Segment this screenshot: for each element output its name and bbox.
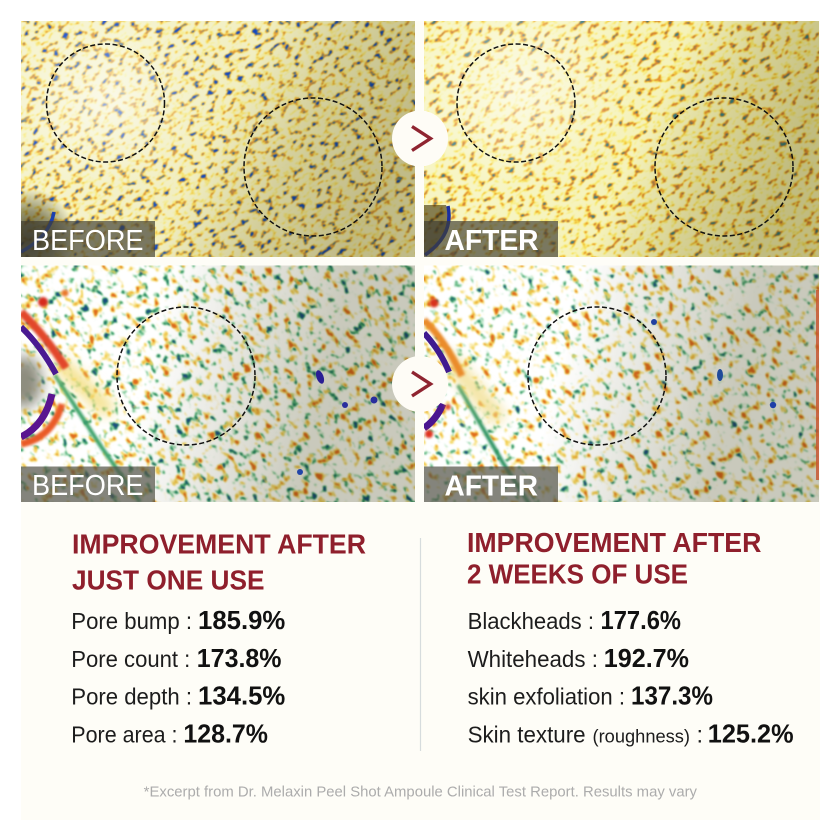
dashed circles: after top [457,44,793,236]
arrow badge: bottom [392,356,448,412]
results list: two weeks: Blackheads : [468,608,594,634]
results list: one use: 173.8% [197,643,282,673]
photo: before, pore map [21,21,415,257]
label: after top [424,221,558,257]
results list: two weeks: Skin texture [468,722,586,748]
photo: after, texture map [424,265,819,505]
label: after bottom [424,466,558,502]
results list: one use: 128.7% [183,718,268,748]
label: after bottom: AFTER [444,470,538,502]
results list: two weeks: 192.7% [604,643,689,673]
results list: two weeks: Whiteheads : [468,646,598,672]
results list: two weeks: skin exfoliation : [468,684,625,710]
dashed circles: before top [46,44,382,236]
footnote: *Excerpt from Dr. Melaxin Peel Shot Ampoule Clinical Test Report. Results may vary [144,784,698,800]
divider [420,538,422,751]
results list: one use: Pore count : [71,646,190,672]
results list: two weeks [468,605,794,748]
dashed circle: before bottom [117,307,255,445]
results list: one use: Pore area : [71,722,178,748]
label: before bottom: BEFORE [32,470,144,502]
label: before top: BEFORE [32,225,144,257]
results list: two weeks: (roughness) [592,726,690,746]
results list: one use: 185.9% [198,605,285,635]
results list: one use: Pore depth : [71,684,192,710]
heading: after one use [72,528,366,596]
heading: after one use: JUST ONE USE [72,564,264,596]
results list: two weeks: : [696,722,703,748]
heading: after two weeks: IMPROVEMENT AFTER [467,527,762,558]
heading: after one use: IMPROVEMENT AFTER [72,528,366,560]
photo: after, pore map [424,21,819,257]
results list: one use: Pore bump : [71,608,192,634]
arrow badge: top [392,110,448,166]
label: after top: AFTER [444,225,538,257]
results list: two weeks: 125.2% [708,718,794,748]
heading: after two weeks [467,527,762,590]
results list: two weeks: 137.3% [631,680,713,710]
results list: one use: 134.5% [198,680,285,710]
results list: two weeks: 177.6% [600,605,681,635]
dashed circle: after bottom [528,307,666,445]
results list: one use [71,605,285,748]
photo: before, texture map [6,265,415,502]
heading: after two weeks: 2 WEEKS OF USE [467,558,688,590]
